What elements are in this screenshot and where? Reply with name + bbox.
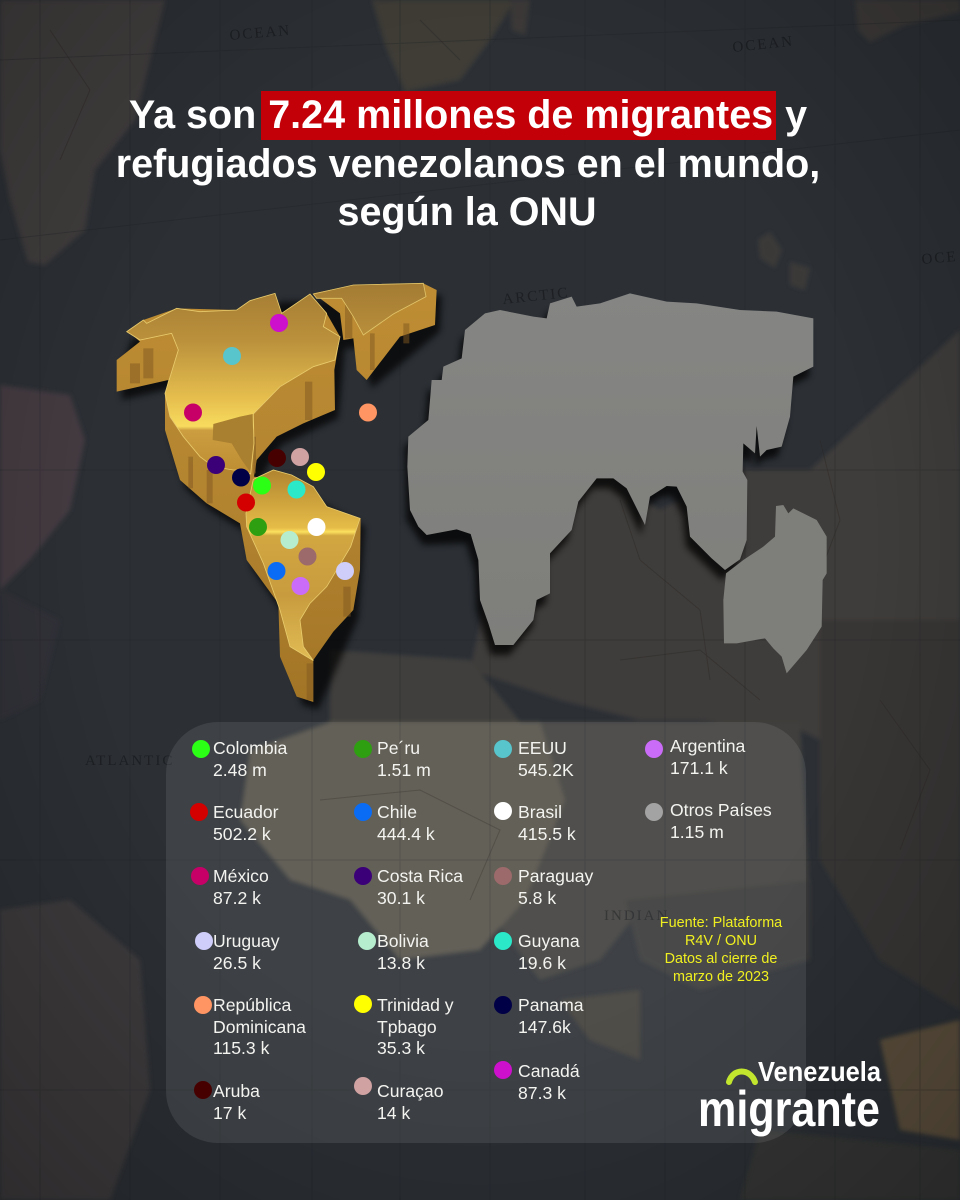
- icon: green arc: [729, 1072, 755, 1082]
- Gulf dent: [213, 414, 253, 472]
- legend item: Brasil: Brasil: [518, 802, 562, 822]
- legend item: Colombia: [192, 738, 288, 780]
- legend item: Trinidad y Tobago: 35.3 k: [377, 1038, 425, 1058]
- panel: legend background: [166, 722, 806, 1143]
- background: old world map: ARCTIC: [502, 285, 570, 308]
- logo: Venezuela migrante: [698, 1056, 882, 1137]
- legend item: Panama: 147.6k: [518, 1017, 571, 1037]
- legend item: Uruguay: [195, 931, 280, 973]
- legend item: EEUU: [494, 738, 574, 780]
- legend item: Panama: Panama: [518, 995, 584, 1015]
- legend item: República Dominicana: [194, 995, 306, 1058]
- legend item: Trinidad y Tobago: Trinidad y: [377, 995, 454, 1015]
- legend item: Chile: [354, 802, 435, 844]
- legend item: Bolivia: [358, 931, 429, 973]
- legend item: Paraguay: 5.8 k: [518, 888, 556, 908]
- legend: [190, 736, 772, 1123]
- legend item: Trinidad y Tobago: Tpbago: [377, 1017, 437, 1037]
- legend item: Perú: [354, 738, 431, 780]
- legend item: Costa Rica: Costa Rica: [377, 866, 463, 886]
- legend item: Chile: 444.4 k: [377, 824, 435, 844]
- legend item: México: 87.2 k: [213, 888, 261, 908]
- legend item: EEUU: EEUU: [518, 738, 567, 758]
- legend item: Bolivia: Bolivia: [377, 931, 429, 951]
- legend item: República Dominicana: República: [213, 995, 291, 1015]
- title: [116, 91, 820, 234]
- legend item: Perú: Pe´ru: [377, 738, 420, 758]
- legend item: Uruguay: Uruguay: [213, 931, 280, 951]
- legend item: Curaçao: [354, 1077, 444, 1123]
- legend item: Costa Rica: 30.1 k: [377, 888, 425, 908]
- legend item: Argentina: Argentina: [670, 736, 745, 756]
- title: según la ONU: [338, 190, 596, 234]
- legend item: Otros Países: [645, 800, 772, 842]
- source note: R4V / ONU: [685, 933, 757, 949]
- title: Ya son 7.24 millones de migrantes y: [129, 93, 807, 137]
- legend item: Aruba: [194, 1081, 260, 1123]
- South America top: [246, 470, 360, 661]
- legend item: Argentina: [645, 736, 746, 778]
- legend item: Colombia: Colombia: [213, 738, 287, 758]
- legend item: Guyana: Guyana: [518, 931, 580, 951]
- background: old world map: OCEAN: [732, 34, 795, 56]
- North America top: [127, 293, 340, 474]
- legend item: Panama: [494, 995, 584, 1037]
- legend item: Ecuador: [190, 802, 279, 844]
- legend item: República Dominicana: 115.3 k: [213, 1038, 269, 1058]
- legend item: Guyana: [494, 931, 580, 973]
- map: grey Australia: [723, 505, 827, 673]
- legend item: EEUU: 545.2K: [518, 760, 574, 780]
- legend item: Canadá: Canadá: [518, 1061, 580, 1081]
- source note: marzo de 2023: [673, 969, 769, 985]
- legend item: Paraguay: [494, 866, 594, 908]
- logo: Venezuela migrante: Venezuela: [758, 1056, 881, 1087]
- source note: Datos al cierre de: [665, 951, 777, 967]
- legend item: Aruba: 17 k: [213, 1103, 246, 1123]
- legend item: República Dominicana: Dominicana: [213, 1017, 306, 1037]
- background: old world map: OCEAN: [229, 23, 292, 44]
- legend item: Otros Países: 1.15 m: [670, 822, 724, 842]
- title: refugiados venezolanos en el mundo,: [116, 142, 820, 186]
- legend item: Bolivia: 13.8 k: [377, 953, 425, 973]
- legend item: Brasil: 415.5 k: [518, 824, 576, 844]
- country dots on map: [184, 314, 377, 595]
- legend item: México: [191, 866, 269, 908]
- legend item: Chile: Chile: [377, 802, 417, 822]
- map: grey Europe, Africa, Asia and Oceania: [404, 293, 827, 673]
- Greenland top: [313, 283, 426, 335]
- legend item: Curaçao: 14 k: [377, 1103, 410, 1123]
- extruded sides: [117, 293, 361, 702]
- legend item: Canadá: [494, 1061, 580, 1103]
- map: golden Americas: [117, 283, 442, 710]
- legend item: Otros Países: Otros Países: [670, 800, 772, 820]
- source note: Fuente: Plataforma: [660, 915, 782, 931]
- legend item: Aruba: Aruba: [213, 1081, 260, 1101]
- background: old world map: INDIAN: [604, 908, 669, 924]
- legend item: Ecuador: Ecuador: [213, 802, 279, 822]
- background: old world map: ATLANTIC: [85, 753, 174, 769]
- legend item: Ecuador: 502.2 k: [213, 824, 271, 844]
- legend item: Brasil: [494, 802, 576, 844]
- legend item: Curaçao: Curaçao: [377, 1081, 444, 1101]
- legend item: Uruguay: 26.5 k: [213, 953, 261, 973]
- legend item: Colombia: 2.48 m: [213, 760, 267, 780]
- legend item: Argentina: 171.1 k: [670, 758, 728, 778]
- legend item: Perú: 1.51 m: [377, 760, 431, 780]
- source note: [660, 915, 782, 985]
- legend item: Canadá: 87.3 k: [518, 1083, 566, 1103]
- background: old world map: OCE: [921, 249, 958, 268]
- legend item: Costa Rica: [354, 866, 464, 908]
- legend item: Guyana: 19.6 k: [518, 953, 566, 973]
- legend item: Trinidad y Tobago: [354, 995, 454, 1058]
- legend item: Paraguay: Paraguay: [518, 866, 593, 886]
- legend item: México: México: [213, 866, 269, 886]
